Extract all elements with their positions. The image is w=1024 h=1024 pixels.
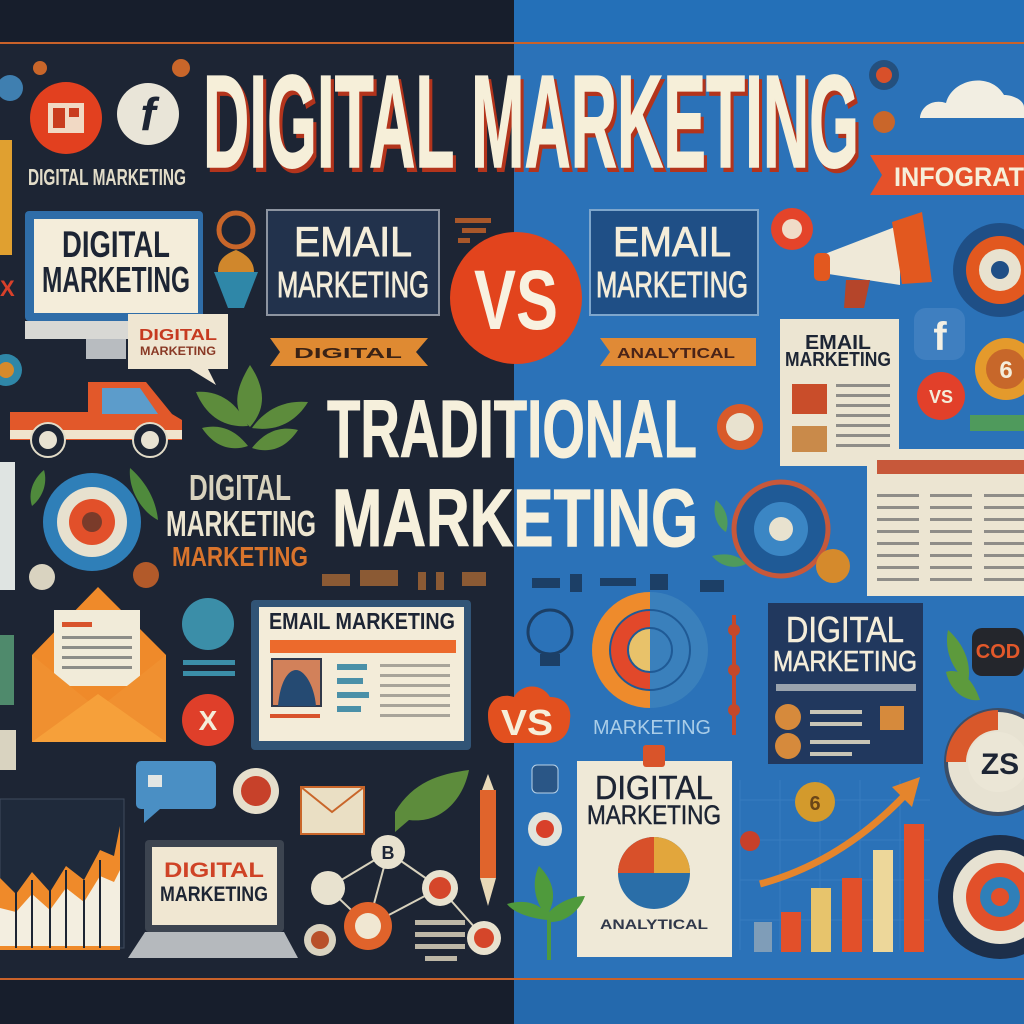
panel: monitor digital marketing <box>25 211 203 359</box>
icon: left edge stacked cards <box>0 635 16 770</box>
icon: coin: 6 <box>809 793 821 815</box>
icon: leaves and red hexagon right: COD <box>976 641 1020 663</box>
panel: newspaper spread <box>867 449 1024 596</box>
icon: facebook badge: f <box>933 315 947 359</box>
chart: radial pie <box>592 592 708 708</box>
ribbon: digital left: DIGITAL <box>294 345 402 362</box>
panel: digital marketing navy: MARKETING <box>773 646 917 678</box>
chart: rising bars with arrow <box>754 777 924 952</box>
heading: digital marketing stacked: MARKETING <box>172 541 308 572</box>
panel: email marketing monitor: EMAIL MARKETING <box>269 608 455 634</box>
icon: teal circle <box>182 598 234 650</box>
icon: laurels <box>30 468 158 520</box>
decoration: green stripe <box>970 415 1024 431</box>
icon: green leaves left <box>196 365 308 450</box>
panel: email marketing monitor <box>251 600 471 750</box>
panel: laptop digital marketing <box>128 840 298 958</box>
callout: speech bubble <box>128 314 228 385</box>
heading: traditional marketing: MARKETING <box>332 473 698 564</box>
badge: VS small orange cloud: VS <box>501 702 553 743</box>
icon: left edge sheet <box>0 462 15 590</box>
label: digital marketing small: DIGITAL MARKETING <box>28 164 186 190</box>
panel: email marketing blue: MARKETING <box>596 264 748 305</box>
heading: digital marketing stacked: DIGITAL <box>189 467 291 508</box>
icon: chat bubble <box>136 761 216 823</box>
icon: plant pot ornament <box>214 213 258 308</box>
chart: orange area graph <box>0 799 124 950</box>
badge: VS centre <box>450 232 582 364</box>
icon: megaphone <box>814 212 932 308</box>
panel: digital marketing notice: MARKETING <box>587 800 721 830</box>
icon: small envelope <box>301 787 364 834</box>
panel: monitor digital marketing: MARKETING <box>42 259 190 300</box>
icon: facebook badge <box>914 308 965 360</box>
icon: small orange pot <box>873 111 895 133</box>
panel: email marketing dark: MARKETING <box>277 264 429 305</box>
heading: digital marketing stacked: MARKETING <box>166 503 316 544</box>
diagram: network nodes: B <box>382 843 394 863</box>
icon: round lock badge <box>717 404 763 450</box>
diagram: network nodes <box>304 835 501 956</box>
icon: small leaves right <box>712 500 746 567</box>
icon: concentric target bottom right <box>938 835 1024 959</box>
icon: vs badge red: VS <box>929 387 953 407</box>
ribbon: infographic <box>870 155 1024 195</box>
icon: f badge: f <box>140 88 160 140</box>
icon: ZS target <box>946 710 1024 814</box>
icon: target right <box>953 223 1024 317</box>
icon: orange truck <box>10 382 182 457</box>
icon: cloud <box>920 81 1024 118</box>
icon: vs badge red <box>917 372 965 420</box>
icon: small dash cluster <box>455 218 491 243</box>
icon: pencil <box>480 774 496 906</box>
panel: digital marketing navy: DIGITAL <box>786 609 904 650</box>
panel: digital marketing notice <box>577 745 732 957</box>
icon: f badge <box>117 83 179 145</box>
decoration: blue bars <box>183 660 235 676</box>
icon: ZS target: ZS <box>981 748 1019 781</box>
decoration: red vertical chain <box>728 615 740 735</box>
icon: number badge: 6 <box>999 357 1013 384</box>
label: marketing: MARKETING <box>593 717 711 739</box>
icon: red social badge <box>30 82 102 154</box>
panel: newspaper email marketing: EMAIL <box>805 332 871 354</box>
icon: small red dot <box>740 831 760 851</box>
icon: red circle small <box>771 208 813 250</box>
panel: laptop digital marketing: MARKETING <box>160 883 268 906</box>
panel: newspaper email marketing: MARKETING <box>785 349 891 371</box>
icon: small clip icon <box>528 765 562 846</box>
icon: envelope with letter <box>32 587 166 742</box>
heading: digital marketing stacked <box>166 467 316 572</box>
panel: digital marketing notice: DIGITAL <box>595 769 713 806</box>
decoration: small dark icons strip <box>532 574 724 592</box>
icon: coin <box>795 782 835 822</box>
icon: number badge <box>975 338 1024 400</box>
icon: red x circle: X <box>199 705 218 736</box>
badge: VS centre: VS <box>474 253 558 347</box>
panel: email marketing dark: EMAIL <box>294 218 412 265</box>
panel: email marketing dark <box>267 210 439 315</box>
icon: leaf <box>395 770 469 832</box>
icon: left edge teal ring <box>0 354 22 386</box>
icon: left edge red mark: X <box>0 276 15 301</box>
panel: email marketing blue: EMAIL <box>613 218 731 265</box>
panel: laptop digital marketing: DIGITAL <box>164 859 264 882</box>
ribbon: analytics right <box>600 338 756 366</box>
ribbon: analytics right: ANALYTICAL <box>617 345 735 362</box>
panel: monitor digital marketing: DIGITAL <box>62 224 170 265</box>
callout: speech bubble: DIGITAL <box>139 327 217 344</box>
panel: newspaper email marketing <box>780 319 899 466</box>
icon: target left <box>43 473 141 571</box>
icon: small balloon <box>528 610 572 666</box>
heading: traditional marketing: TRADITIONAL <box>327 384 697 475</box>
badge: VS small orange cloud <box>488 686 570 743</box>
icon: red x circle <box>182 694 234 746</box>
icon: leaves and red hexagon right <box>946 628 1024 700</box>
callout: speech bubble: MARKETING <box>140 344 216 358</box>
panel: digital marketing navy <box>768 603 923 764</box>
panel: email marketing blue <box>590 210 758 315</box>
icon: small circles <box>29 562 159 590</box>
icon: blue radial target <box>734 482 850 583</box>
heading: traditional marketing <box>327 384 698 564</box>
icon: small target top <box>869 60 899 90</box>
decoration: dash strip <box>322 570 486 590</box>
ribbon: digital left <box>270 338 428 366</box>
icon: red circle <box>233 768 279 814</box>
icon: top-left edge icons <box>0 59 190 101</box>
icon: left edge pencil <box>0 140 12 255</box>
icon: green plant <box>507 866 585 960</box>
decoration: small text block <box>415 920 465 961</box>
panel: digital marketing notice: ANALYTICAL <box>600 916 709 932</box>
